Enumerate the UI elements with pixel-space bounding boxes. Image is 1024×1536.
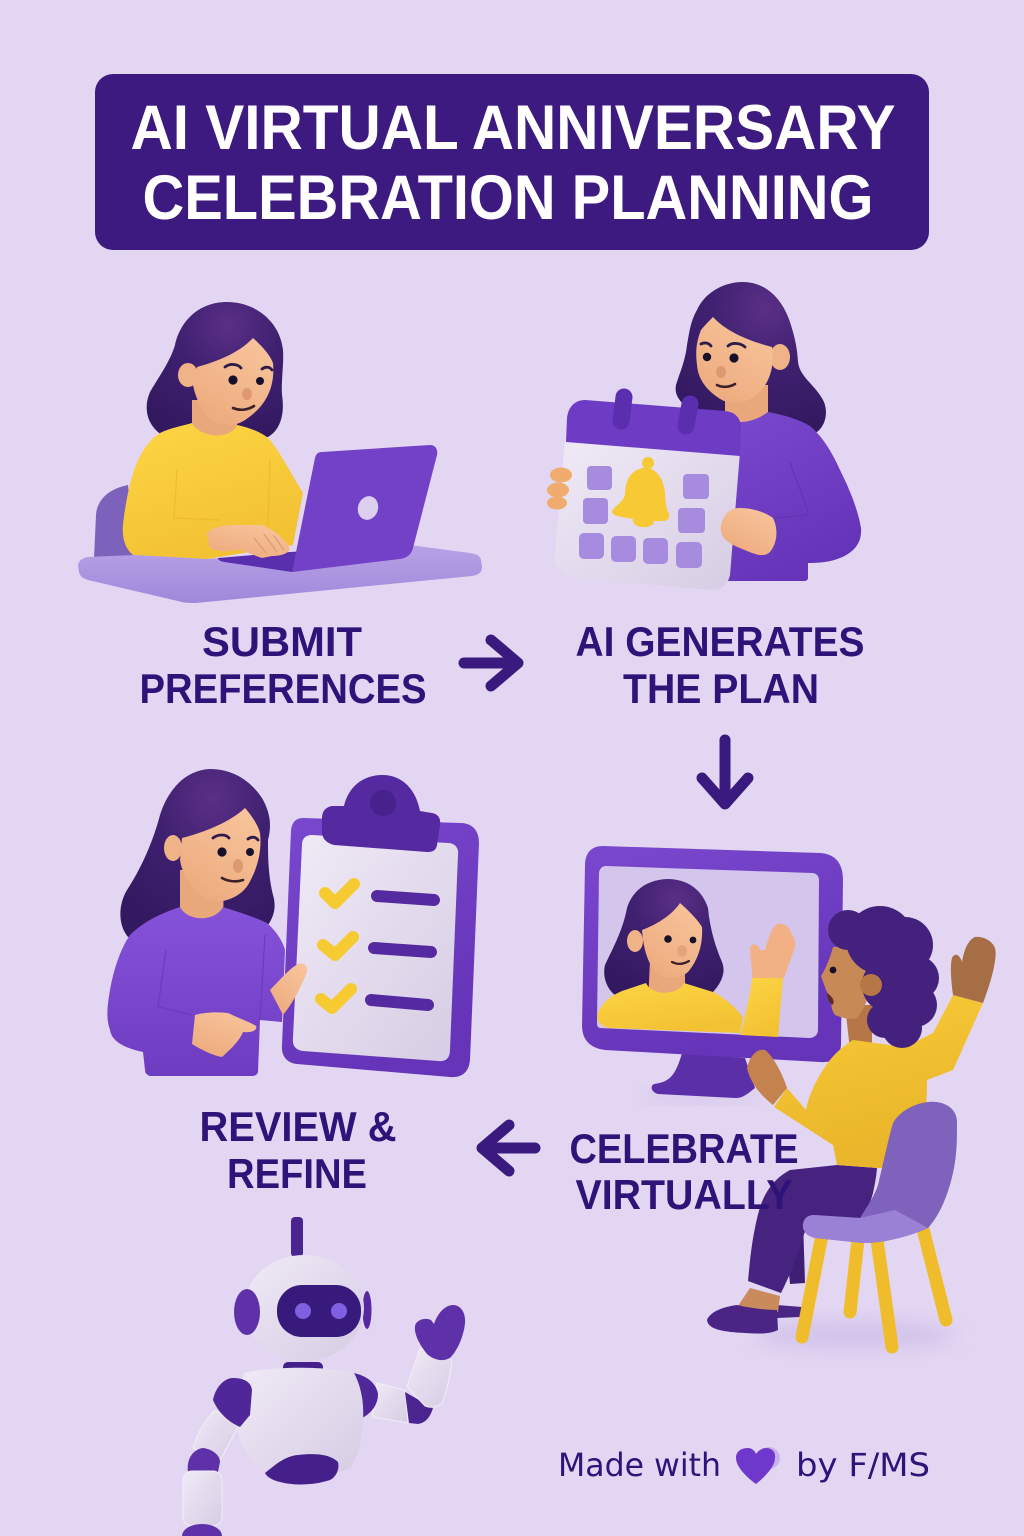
icon: face [193, 338, 273, 425]
icon: video face features [664, 935, 696, 964]
icon: calendar cells [579, 466, 709, 568]
illustration: person with checklist [107, 769, 479, 1077]
icon: face [696, 317, 773, 403]
illustration: monitor video call [582, 846, 843, 1102]
label: submit preferences: SUBMIT [202, 618, 362, 665]
icon: right upper arm [407, 1348, 452, 1407]
icon: chair [803, 1102, 957, 1243]
icon: hand [207, 525, 290, 558]
icon: right forearm [372, 1383, 408, 1423]
icon: ear [178, 363, 198, 387]
arrow: left [482, 1125, 535, 1171]
icon: left hand fingers [547, 468, 572, 510]
illustration: robot [182, 1217, 465, 1536]
icon: sweater [123, 423, 303, 559]
icon: left elbow [188, 1448, 220, 1472]
icon: hair [676, 282, 826, 432]
icon: antenna [291, 1217, 303, 1257]
icon: clip hole [370, 790, 396, 816]
icon: ear [770, 344, 790, 370]
icon: hair [147, 302, 283, 437]
label: submit preferences: PREFERENCES [140, 665, 426, 712]
icon: clipboard clip [322, 775, 440, 852]
icon: face [180, 808, 260, 901]
icon: left shoulder [213, 1378, 252, 1427]
icon: bell [612, 457, 669, 527]
icon: ear left [234, 1289, 260, 1335]
icon: video person ear [627, 930, 643, 952]
icon: calendar rings [621, 397, 690, 426]
icon: facial features [701, 343, 745, 387]
title banner: CELEBRATION PLANNING [142, 163, 874, 233]
illustration: person with calendar [547, 282, 861, 590]
icon: sweater [107, 907, 285, 1076]
icon: sleeve crease [775, 462, 808, 518]
icon: sweater [774, 995, 983, 1168]
icon: neck [845, 1005, 872, 1050]
icon: right shoulder [353, 1373, 378, 1418]
icon: floor shadow [755, 1319, 955, 1351]
icon: neck [283, 1362, 323, 1377]
icon: robot mitt [415, 1305, 465, 1360]
icon: sleeve crease [158, 935, 265, 1020]
icon: neck [192, 400, 237, 445]
credit line: Made with [558, 1446, 721, 1484]
icon: ankle [738, 1288, 780, 1312]
title banner: AI VIRTUAL ANNIVERSARY [130, 93, 896, 163]
icon: heart glow [758, 1447, 780, 1469]
icon: check marks [321, 884, 354, 1008]
icon: laptop screen [292, 445, 437, 572]
illustration: person at laptop [78, 302, 482, 603]
icon: monitor stand [652, 1053, 755, 1098]
icon: left upper arm [193, 1410, 238, 1460]
icon: far leg [785, 1220, 805, 1284]
icon: monitor shadow [640, 1090, 760, 1102]
icon: fingers [254, 534, 284, 553]
icon: video person neck [648, 960, 685, 1005]
label: submit preferences [140, 618, 426, 712]
icon: chair legs [802, 1225, 946, 1347]
title banner [95, 74, 929, 250]
icon: clipboard frame [282, 818, 479, 1077]
icon: ear [164, 835, 182, 861]
icon: monitor screen [597, 866, 819, 1038]
icon: ear [860, 974, 882, 996]
icon: belly base [265, 1454, 338, 1484]
icon: laptop base [218, 545, 408, 572]
icon: front hand [747, 1050, 787, 1105]
icon: sweater [727, 412, 861, 581]
icon: calendar body [555, 440, 740, 590]
illustration: seated person waving [707, 906, 996, 1351]
icon: heart [736, 1448, 775, 1484]
icon: robot left hand [182, 1524, 222, 1536]
icon: thumb hand [270, 963, 307, 1015]
icon: clipboard paper [293, 835, 458, 1061]
icon: facial features [213, 835, 258, 881]
label: AI generates the plan [576, 618, 864, 712]
icon: neck [180, 870, 224, 930]
icon: checklist lines [371, 896, 434, 1005]
icon: raised hand [951, 937, 996, 1003]
icon: monitor frame [582, 846, 843, 1062]
icon: chair seat [803, 1210, 928, 1243]
arrow: down [702, 740, 748, 804]
credit line [558, 1446, 930, 1484]
icon: eye and mouth [827, 967, 836, 1005]
icon: left lower arm [183, 1471, 222, 1526]
icon: shoe [707, 1305, 778, 1334]
icon: ear right [362, 1291, 372, 1329]
icon: sleeve crease [174, 460, 270, 525]
icon: curly hair [828, 906, 939, 1048]
icon: video waving arm [740, 978, 783, 1037]
icon: desk [78, 545, 482, 603]
icon: right elbow [405, 1392, 433, 1424]
icon: face [821, 947, 870, 1019]
icon: facial features [225, 364, 272, 410]
icon: neck [725, 385, 768, 430]
label: celebrate virtually [570, 1125, 798, 1218]
label: celebrate virtually: CELEBRATE [570, 1125, 798, 1172]
icon: legs [748, 1165, 877, 1293]
label: AI generates the plan: AI GENERATES [576, 618, 864, 665]
icon: video waving hand [750, 924, 795, 978]
label: review and refine [200, 1103, 396, 1197]
icon: pointing hand [192, 1012, 256, 1057]
label: review and refine: REVIEW & [200, 1103, 396, 1150]
icon: calendar header [566, 400, 741, 456]
label: AI generates the plan: THE PLAN [623, 665, 819, 712]
icon: video person face [642, 903, 702, 978]
icon: visor [277, 1285, 361, 1337]
icon: head [244, 1255, 364, 1361]
icon: torso [238, 1368, 363, 1476]
icon: chair back [94, 485, 135, 558]
label: celebrate virtually: VIRTUALLY [576, 1171, 792, 1218]
icon: laptop logo [355, 493, 381, 523]
arrow: right [464, 640, 518, 686]
icon: far shoe [777, 1305, 802, 1318]
icon: video person body [598, 983, 743, 1033]
icon: video person hair [604, 879, 724, 995]
label: review and refine: REFINE [227, 1150, 367, 1197]
credit line: by F/MS [796, 1446, 930, 1484]
icon: right hand [721, 508, 776, 555]
icon: eyes [295, 1303, 347, 1319]
icon: hair [120, 769, 275, 937]
